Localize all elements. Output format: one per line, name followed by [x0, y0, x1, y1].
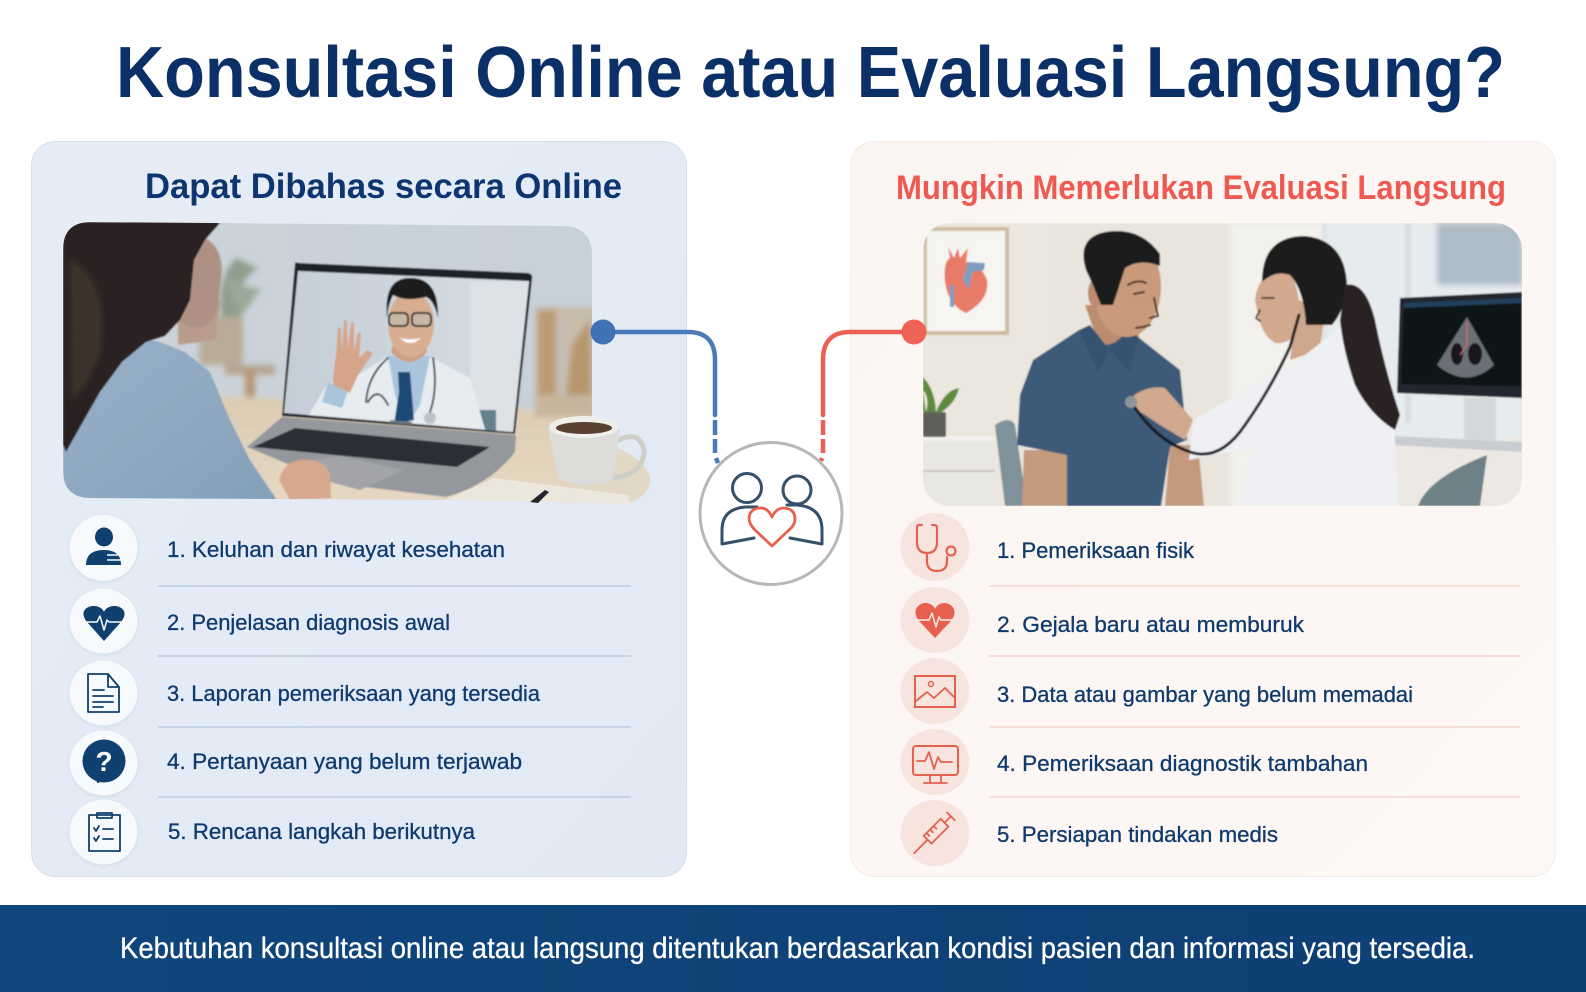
- title: Konsultasi Online atau Evaluasi Langsung?: [116, 33, 1505, 113]
- heart poster: [924, 227, 1009, 335]
- text 3: 3. Data atau gambar yang belum memadai: [997, 682, 1413, 707]
- item 5: syringe icon: [900, 800, 970, 866]
- text 2: 2. Gejala baru atau memburuk: [997, 612, 1305, 637]
- item 4: question icon: [70, 730, 138, 796]
- panel: online: [32, 142, 686, 876]
- text 4: 4. Pertanyaan yang belum terjawab: [167, 749, 522, 774]
- item 3: document icon: [70, 660, 138, 726]
- item 4: monitor icon: [900, 729, 970, 795]
- item 2: heart icon: [900, 587, 970, 653]
- photo: video consultation: [63, 222, 663, 504]
- item 2: heart icon: [70, 588, 138, 654]
- chair: [995, 420, 1027, 506]
- text 1: 1. Keluhan dan riwayat kesehatan: [167, 537, 505, 562]
- table edge, notebook: [560, 440, 650, 503]
- heading: online: Dapat Dibahas secara Online: [145, 167, 622, 206]
- text 1: 1. Pemeriksaan fisik: [997, 538, 1195, 563]
- list: in-person items: [900, 513, 1520, 866]
- footer banner: [0, 905, 1586, 992]
- list: online items: [70, 515, 631, 864]
- monitor: [1393, 292, 1522, 506]
- connector: red: [821, 320, 926, 461]
- footer banner: Kebutuhan konsultasi online atau langsung ditentukan berdasarkan kondisi pasien dan informasi yang tersedia.: [120, 932, 1475, 965]
- item 5: clipboard icon: [70, 800, 138, 864]
- item 3: image icon: [900, 658, 970, 724]
- mug: [548, 416, 644, 486]
- patient: [1017, 231, 1204, 506]
- woman's sweater and hair: [63, 222, 277, 500]
- plant and cabinet: [923, 376, 996, 472]
- text 3: 3. Laporan pemeriksaan yang tersedia: [167, 681, 540, 706]
- item 1: stethoscope icon: [900, 513, 970, 581]
- center icon: people with heart: [700, 442, 842, 584]
- panel: in-person: [850, 142, 1556, 876]
- text 5: 5. Persiapan tindakan medis: [997, 822, 1278, 847]
- photo: physical examination: [923, 223, 1522, 506]
- text 4: 4. Pemeriksaan diagnostik tambahan: [997, 751, 1368, 776]
- laptop: [247, 262, 532, 497]
- connector: blue: [590, 320, 718, 463]
- text 2: 2. Penjelasan diagnosis awal: [167, 610, 450, 635]
- doctor: [1125, 236, 1400, 506]
- chair right: [1418, 455, 1487, 506]
- heading: in-person: Mungkin Memerlukan Evaluasi Langsung: [896, 169, 1506, 207]
- item 4: question icon: ?: [95, 746, 113, 777]
- text 5: 5. Rencana langkah berikutnya: [168, 819, 475, 844]
- item 1: person icon: [70, 515, 138, 581]
- woman's hand: [279, 460, 331, 500]
